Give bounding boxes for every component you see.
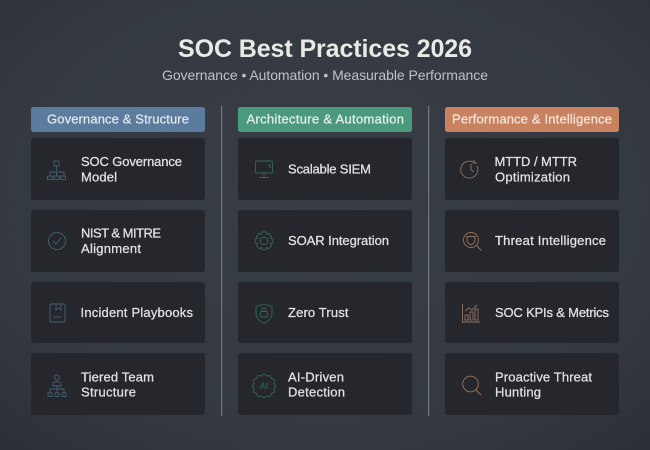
card: Proactive Threat Hunting (445, 353, 619, 415)
divider 2 (428, 106, 429, 416)
card: AI-Driven Detection (238, 353, 412, 415)
icon: gear (255, 232, 273, 250)
label: MTTD / MTTR (494, 154, 577, 169)
label (81, 370, 154, 400)
panel: performance and intelligence (445, 107, 619, 415)
label: AI-Driven (288, 370, 344, 385)
label: Hunting (495, 385, 541, 400)
label: Model (81, 170, 117, 184)
icon: clock cycle (461, 160, 478, 178)
card: SOC Governance Model (31, 138, 205, 200)
label: SOAR Integration (288, 233, 389, 248)
divider 1 (221, 106, 222, 416)
label (81, 154, 182, 184)
title: SOC Best Practices 2026 (178, 35, 472, 63)
label: Zero Trust (288, 305, 349, 320)
card: NIST and MITRE Alignment (31, 210, 205, 272)
heading: performance and intelligence: Performance & Intelligence (452, 112, 612, 126)
icon: monitor (256, 161, 272, 178)
heading: governance and structure (31, 107, 205, 132)
icon: playbook (50, 304, 65, 322)
label (81, 226, 161, 256)
label: Detection (288, 385, 345, 400)
icon: hierarchy (48, 161, 66, 180)
card: SOAR Integration (238, 210, 412, 272)
panel: architecture and automation (238, 107, 412, 415)
label (494, 154, 577, 184)
heading: architecture and automation: Architecture & Automation (246, 112, 404, 126)
label: Scalable SIEM (288, 162, 371, 176)
panel: governance and structure (31, 107, 205, 415)
heading: governance and structure: Governance & Structure (47, 112, 189, 126)
label: Tiered Team (81, 370, 154, 385)
card: Tiered Team Structure (31, 353, 205, 415)
label: Optimization (495, 170, 570, 184)
label: NIST & MITRE (81, 226, 161, 241)
label: Proactive Threat (495, 370, 592, 385)
subtitle: Governance • Automation • Measurable Performance (162, 67, 488, 83)
label: Threat Intelligence (495, 233, 606, 248)
card: Zero Trust (238, 282, 412, 343)
icon: bar chart (462, 304, 480, 322)
icon: threat search (464, 232, 482, 250)
card: Incident Playbooks (31, 282, 205, 343)
card: SOC KPIs and Metrics (445, 282, 619, 343)
icon: check circle (48, 232, 66, 250)
icon: team tree (48, 375, 66, 396)
icon: AI chip (252, 374, 276, 398)
label: Alignment (81, 241, 141, 256)
card: Scalable SIEM (238, 138, 412, 200)
label (495, 370, 592, 400)
heading: performance and intelligence (445, 107, 619, 132)
label: Incident Playbooks (80, 305, 194, 320)
card: Threat Intelligence (445, 210, 619, 272)
label: SOC KPIs & Metrics (495, 305, 610, 320)
icon: magnifier (463, 376, 481, 395)
label (288, 370, 345, 400)
heading: architecture and automation (238, 107, 412, 132)
icon: shield lock (256, 304, 272, 324)
label: Structure (81, 385, 136, 400)
label: SOC Governance (81, 154, 182, 169)
card: MTTD / MTTR Optimization (445, 138, 619, 200)
icon: AI chip: AI (260, 381, 268, 391)
